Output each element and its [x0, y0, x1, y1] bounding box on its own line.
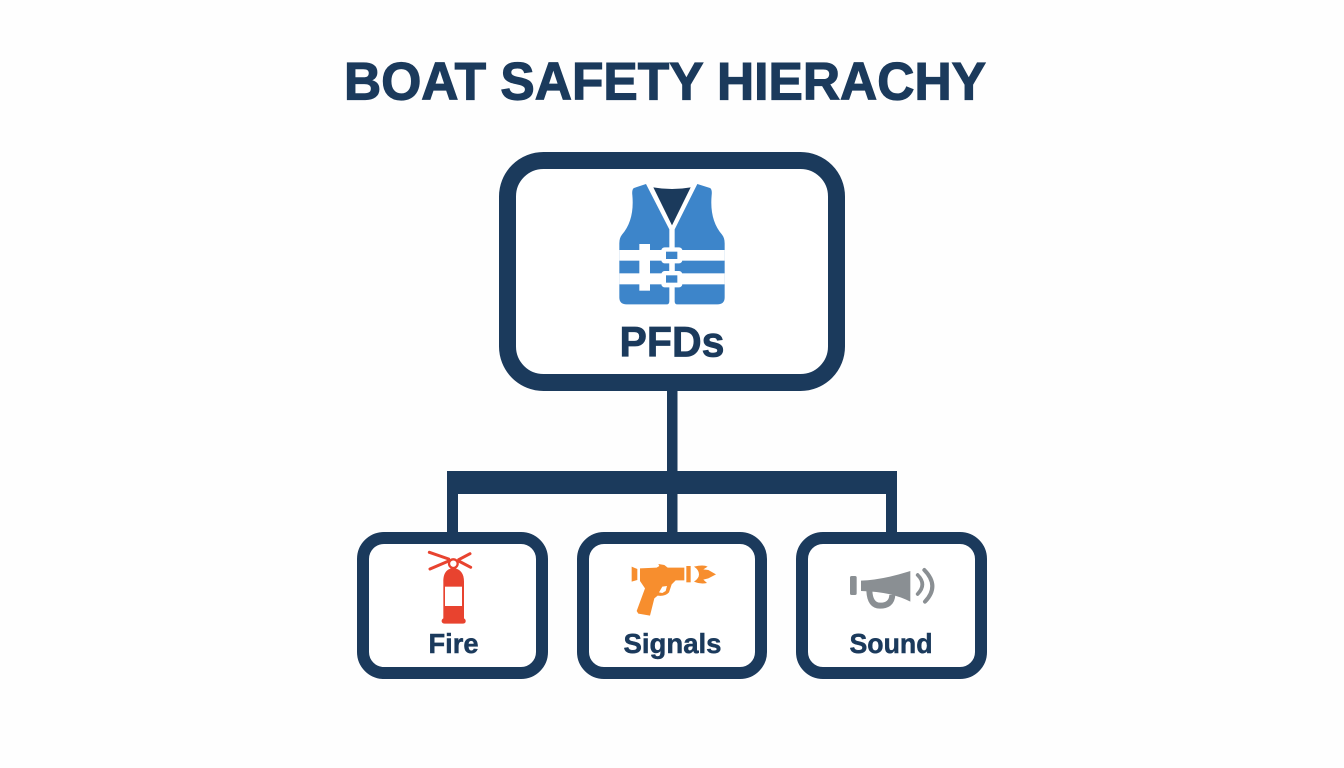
label: Sound: Sound	[850, 628, 932, 659]
panel: PFDs	[508, 160, 836, 382]
icon: life vest	[619, 184, 725, 304]
title: BOAT SAFETY HIERACHY	[344, 52, 986, 112]
label: Fire: Fire	[428, 628, 478, 659]
panel: Sound	[802, 538, 981, 673]
panel: Fire	[363, 538, 542, 673]
label: PFDs: PFDs	[620, 318, 724, 366]
icon: fire extinguisher	[429, 552, 471, 624]
connector: tree lines	[447, 385, 897, 536]
panel: Signals	[583, 538, 761, 673]
icon: flare gun	[632, 564, 716, 616]
icon: air horn	[850, 570, 932, 606]
label: Signals: Signals	[624, 628, 722, 659]
